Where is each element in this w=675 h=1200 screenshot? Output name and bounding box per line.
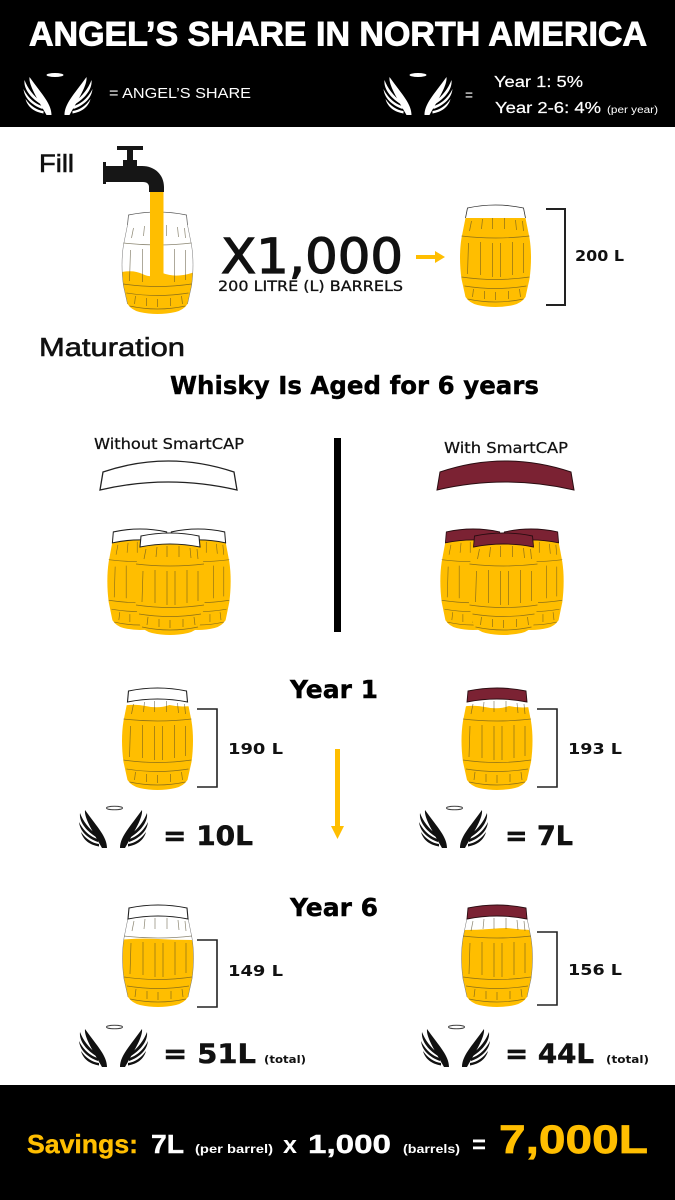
value: 51L: = 51L — [163, 1039, 256, 1070]
barrel: year 6 with SmartCAP — [461, 904, 533, 1007]
heading: year 6: Year 6 — [289, 893, 378, 922]
savings label: Savings: — [27, 1129, 138, 1159]
multiplier: x1,000: X1,000 — [221, 229, 403, 285]
equals sign: = — [465, 87, 473, 104]
note: total: (total) — [264, 1053, 306, 1066]
icon: white angel wings legend — [24, 73, 92, 115]
bracket: 156 L — [537, 932, 557, 1005]
barrel group: without SmartCAP — [107, 528, 231, 635]
times sign: x — [283, 1132, 298, 1159]
rate: year 2-6: Year 2-6: 4% — [495, 100, 601, 117]
label: 156 L: 156 L — [568, 961, 623, 979]
legend: angel's share: = ANGEL’S SHARE — [109, 85, 251, 102]
value: 10L: = 10L — [163, 821, 253, 852]
icon: black wings — [419, 806, 488, 848]
label: 200 L: 200 L — [575, 247, 624, 265]
bracket: 200 L — [546, 209, 565, 305]
note: barrels: (barrels) — [403, 1142, 460, 1156]
heading: year 1: Year 1 — [289, 675, 378, 704]
icon: black wings — [79, 1025, 148, 1067]
arrow: to full barrel — [416, 251, 445, 263]
full barrel — [460, 204, 531, 307]
panel: savings footer — [0, 1085, 675, 1200]
icon: black wings — [421, 1025, 490, 1067]
subheading: Whisky Is Aged for 6 years — [170, 371, 539, 400]
heading: fill: Fill — [39, 150, 74, 178]
label: 190 L: 190 L — [228, 740, 284, 758]
title: ANGEL’S SHARE IN NORTH AMERICA — [29, 16, 647, 54]
label: with SmartCAP: With SmartCAP — [444, 439, 568, 457]
label: 149 L: 149 L — [228, 962, 284, 980]
icon: white angel wings rates — [384, 73, 452, 115]
divider — [334, 438, 341, 632]
value: 44L: = 44L — [505, 1039, 594, 1070]
barrel: year 1 with SmartCAP — [462, 688, 532, 790]
rate: year 1: Year 1: 5% — [494, 74, 583, 91]
caption: barrels: 200 LITRE (L) BARRELS — [218, 279, 403, 295]
bracket: 193 L — [537, 709, 557, 787]
bracket: 149 L — [197, 940, 217, 1007]
rate note: (per year) — [607, 105, 658, 116]
icon: black wings — [79, 806, 148, 848]
icon: SmartCAP — [437, 461, 574, 490]
icon: cap without SmartCAP — [100, 461, 237, 490]
total savings: 7,000L — [499, 1118, 648, 1162]
bracket: 190 L — [197, 709, 217, 787]
label: 193 L: 193 L — [568, 740, 623, 758]
heading: maturation: Maturation — [39, 332, 185, 362]
panel: header — [0, 0, 675, 127]
label: without SmartCAP: Without SmartCAP — [94, 435, 244, 453]
value: 1,000: 1,000 — [308, 1129, 391, 1159]
note: total: (total) — [606, 1053, 649, 1066]
value: 7L: = 7L — [505, 821, 573, 852]
arrow: time — [331, 749, 344, 839]
barrel group: with SmartCAP — [440, 528, 564, 635]
result: angels 51L — [79, 1025, 306, 1070]
barrel: year 6 without SmartCAP — [122, 904, 194, 1007]
barrel: year 1 without SmartCAP — [122, 688, 193, 790]
result: angels 7L — [419, 806, 573, 852]
result: angels 44L — [421, 1025, 649, 1070]
icon: faucet filling barrel — [103, 146, 198, 322]
note: per barrel: (per barrel) — [195, 1142, 273, 1156]
value: 7L: 7L — [151, 1129, 184, 1159]
result: angels 10L — [79, 806, 253, 852]
equals sign: = — [472, 1129, 486, 1159]
